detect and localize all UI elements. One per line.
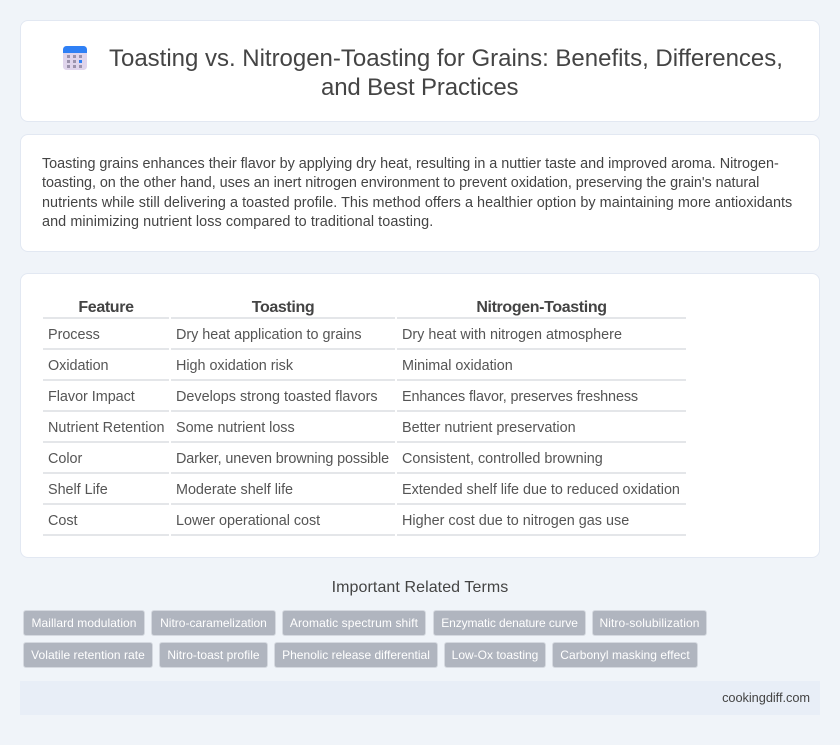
row: Shelf Life: Extended shelf life due to reduced oxidation [402, 482, 680, 498]
row: Nutrient Retention [48, 420, 576, 436]
chip [23, 642, 153, 668]
intro text: nutrients while still delivering a toasted profile. This method offers a healthier option by maintaining more antioxidants [42, 195, 792, 211]
row: Flavor Impact [48, 389, 638, 405]
title: and Best Practices [321, 74, 518, 101]
chip: Low-Ox toasting [452, 648, 538, 662]
row: Flavor Impact: Flavor Impact [48, 389, 135, 405]
row: Oxidation [48, 358, 513, 374]
footer [20, 681, 820, 715]
table header: Nitrogen-Toasting: Nitrogen-Toasting [476, 299, 607, 316]
row: Shelf Life: Moderate shelf life [176, 482, 293, 498]
row: Shelf Life: Shelf Life [48, 482, 108, 498]
row: Oxidation: Oxidation [48, 358, 109, 374]
chip: Nitro-solubilization [599, 616, 700, 630]
row: Shelf Life [48, 482, 680, 498]
intro text: and minimizing nutrient loss compared to traditional toasting. [42, 214, 433, 230]
chip: Nitro-caramelization [160, 616, 267, 630]
chip: Volatile retention rate [31, 648, 145, 662]
intro text: Toasting grains enhances their flavor by applying dry heat, resulting in a nuttier taste and improved aroma. Nitrogen- [42, 156, 779, 172]
row: Oxidation: High oxidation risk [176, 358, 293, 374]
chip: Phenolic release differential [282, 648, 430, 662]
chip [592, 610, 707, 636]
row: Process: Dry heat application to grains [176, 327, 361, 343]
chip: Enzymatic denature curve [441, 616, 578, 630]
row: Oxidation: Minimal oxidation [402, 358, 513, 374]
panel: comparison table [20, 273, 820, 558]
row: Color: Consistent, controlled browning [402, 451, 603, 467]
row: Process: Dry heat with nitrogen atmosphere [402, 327, 622, 343]
chip: Aromatic spectrum shift [290, 616, 418, 630]
chip [23, 610, 145, 636]
panel: intro [20, 134, 820, 252]
chip [282, 610, 426, 636]
heading: Important Related Terms: Important Related Terms [332, 579, 508, 596]
row: Nutrient Retention: Better nutrient preservation [402, 420, 576, 436]
chip: Carbonyl masking effect [560, 648, 690, 662]
row: Color [48, 451, 603, 467]
chip: Maillard modulation [31, 616, 136, 630]
title [109, 45, 783, 101]
chip: Nitro-toast profile [167, 648, 260, 662]
row: Color: Color [48, 451, 82, 467]
chip [552, 642, 698, 668]
icon: calendar [63, 46, 87, 70]
row: Process: Process [48, 327, 100, 343]
chip [444, 642, 546, 668]
row: Flavor Impact: Enhances flavor, preserves freshness [402, 389, 638, 405]
row: Flavor Impact: Develops strong toasted flavors [176, 389, 378, 405]
table header: Feature: Feature [78, 299, 134, 316]
intro text: toasting, on the other hand, uses an inert nitrogen environment to prevent oxidation, preserving the grain's natural [42, 175, 759, 191]
table header: Toasting: Toasting [252, 299, 314, 316]
chip [159, 642, 268, 668]
chip [433, 610, 586, 636]
row: Cost: Lower operational cost [176, 513, 320, 529]
panel: header [20, 20, 820, 122]
row: Nutrient Retention: Some nutrient loss [176, 420, 295, 436]
row: Process [48, 327, 622, 343]
row: Color: Darker, uneven browning possible [176, 451, 389, 467]
chip [274, 642, 438, 668]
chips: related terms [23, 610, 707, 668]
intro text [42, 156, 792, 230]
chip [151, 610, 276, 636]
title: Toasting vs. Nitrogen-Toasting for Grains: Benefits, Differences, [109, 45, 783, 72]
row: Cost: Higher cost due to nitrogen gas use [402, 513, 629, 529]
row: Nutrient Retention: Nutrient Retention [48, 420, 165, 436]
row: Cost [48, 513, 629, 529]
footer source: cookingdiff.com [722, 690, 810, 705]
row: Cost: Cost [48, 513, 77, 529]
